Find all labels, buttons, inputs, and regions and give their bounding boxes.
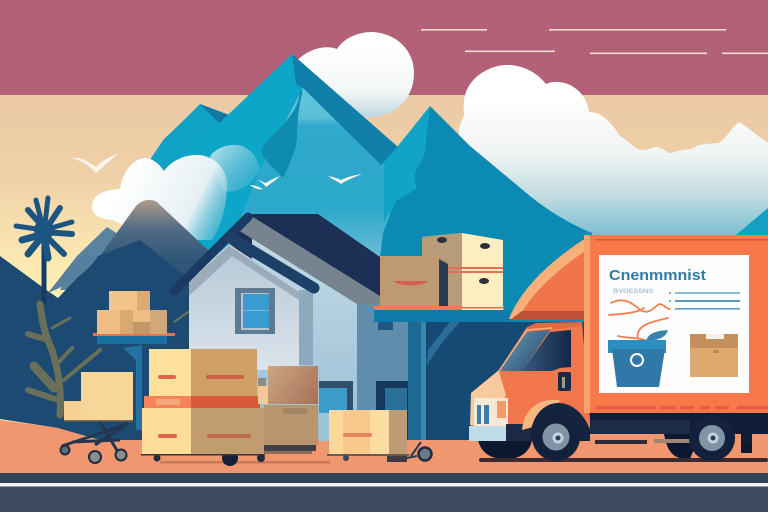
grille	[474, 398, 508, 426]
roof right arm	[231, 238, 314, 288]
wheels	[154, 454, 160, 462]
hill: left peak with warm glow	[90, 200, 208, 300]
window	[235, 288, 275, 334]
shelf: right with boxes	[374, 233, 510, 440]
box smile	[393, 281, 428, 286]
fairing underside	[510, 311, 584, 320]
upper box	[258, 386, 272, 404]
box left highlight	[584, 235, 590, 413]
panel subheading: BVOESSNS	[613, 288, 654, 295]
mirror	[558, 372, 571, 391]
house	[174, 214, 415, 441]
windshield frame	[499, 328, 552, 371]
rear tire behind	[478, 440, 532, 459]
cloud: top behind mountain	[296, 32, 414, 117]
ground	[0, 420, 768, 474]
bird: right	[328, 174, 362, 184]
mountain: central lit face	[150, 54, 398, 280]
wheel arch peach	[522, 400, 560, 430]
background: sky band	[0, 0, 768, 96]
side door	[376, 381, 410, 440]
post shadow	[408, 322, 421, 440]
bottom box	[142, 408, 191, 454]
mountain: far right peak	[730, 208, 768, 240]
wheels	[418, 448, 432, 460]
shadow	[479, 458, 768, 462]
upper box	[109, 291, 150, 310]
mountain: right peak lit ridge	[384, 106, 430, 222]
red band	[144, 396, 191, 408]
top box	[149, 349, 191, 396]
cab fairing outer	[509, 235, 600, 319]
front wall roof shadow	[189, 246, 299, 300]
shelf post	[123, 345, 142, 430]
panel background	[599, 255, 749, 393]
grey gable band	[238, 217, 380, 304]
sky streaks	[421, 29, 768, 54]
bumper	[469, 426, 506, 441]
panel lines	[669, 292, 740, 310]
gap shadow	[439, 259, 448, 306]
background: sunset sand band	[0, 95, 768, 440]
cab nose peach	[470, 370, 506, 425]
garage door	[319, 381, 353, 441]
front wheel	[532, 413, 580, 461]
mountain: right peak	[380, 106, 592, 330]
cab fairing inner	[522, 252, 584, 312]
back roof	[225, 214, 380, 300]
shelf: left with boxes	[93, 291, 175, 430]
box stack: center left	[141, 349, 330, 466]
panel scribble	[609, 300, 670, 341]
road: white line	[0, 483, 768, 486]
cargo box body	[584, 235, 768, 413]
cloud: pale blue behind left cloud	[210, 145, 260, 192]
box stack: center right	[258, 366, 318, 454]
side wall shaded	[357, 296, 415, 440]
box bottom dashes	[596, 406, 768, 410]
box cart: front	[327, 410, 432, 462]
shelf bracket	[378, 322, 393, 330]
truck	[469, 235, 768, 462]
shelf stripe	[93, 333, 175, 336]
bucket icon	[608, 330, 668, 387]
cab body	[471, 322, 590, 441]
back wall	[250, 235, 357, 440]
mountain: central inner glow	[215, 88, 390, 280]
mountain: central shaded face	[292, 54, 398, 165]
cloud: left white cloud	[92, 155, 227, 240]
panel heading: Cnenmmnist	[609, 267, 706, 284]
cart handle	[407, 442, 421, 458]
road: lower lane	[0, 486, 768, 512]
back box	[422, 233, 503, 306]
tree silhouette	[427, 322, 460, 365]
side panel	[599, 255, 749, 393]
platform	[264, 445, 316, 451]
platform	[327, 454, 409, 456]
front box	[380, 256, 439, 306]
cab roof trim	[527, 322, 582, 332]
dark hill behind truck	[408, 322, 590, 440]
shelf post	[421, 322, 426, 440]
shelf top	[374, 310, 510, 322]
hill: lighter ridge	[48, 256, 98, 293]
bird: small pair	[258, 176, 280, 187]
box icon	[690, 334, 738, 377]
base	[141, 454, 265, 456]
chassis	[590, 413, 768, 434]
rear wheel	[689, 415, 735, 461]
box top trim	[596, 239, 768, 240]
lower box stack	[97, 310, 167, 334]
hill: far grey blue	[60, 227, 124, 290]
mountain: central shaded fold	[262, 90, 303, 178]
lower box	[264, 405, 318, 445]
shelf stripe	[374, 306, 504, 310]
wheels	[60, 446, 70, 454]
wheel arch dark	[530, 403, 590, 441]
small cart box	[60, 372, 133, 463]
front wall	[189, 244, 299, 370]
hand truck frame	[62, 422, 128, 452]
plant: olive shrub	[28, 304, 188, 415]
box faces	[329, 410, 343, 454]
cloud bank: right	[459, 65, 768, 240]
side window	[522, 330, 571, 371]
mountain: back left peak	[150, 104, 260, 220]
palm tree	[16, 198, 72, 302]
box faces	[64, 401, 81, 421]
bird: large	[72, 154, 118, 173]
under-rail	[595, 440, 647, 444]
shelf top	[97, 336, 167, 344]
windshield	[499, 330, 550, 371]
smile tape	[343, 433, 372, 437]
road: upper lane	[0, 473, 768, 483]
front wall side strip	[299, 290, 313, 365]
cart shadow	[160, 461, 330, 464]
roof left arm	[174, 217, 248, 291]
birds	[72, 154, 362, 189]
mountain: back left shaded side	[200, 104, 229, 123]
hill: dark blue foreground	[0, 240, 200, 440]
